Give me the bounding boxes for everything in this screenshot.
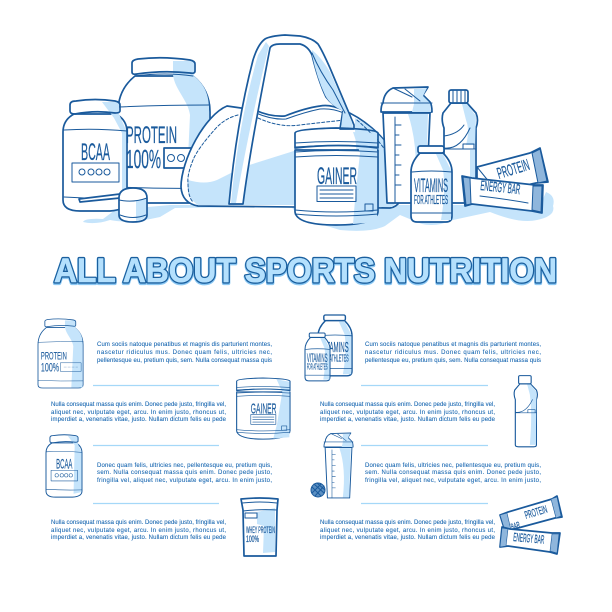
bcaa jar: BCAA (81, 139, 110, 166)
text block 3: fringilla vel, aliquet nec, vulputate eget, arcu. In enim justo, (97, 478, 272, 484)
text block 5: nascetur ridiculus mus. Donec quam felis, ultricies nec, (365, 350, 541, 356)
scoop (79, 188, 147, 222)
title: ALL ABOUT SPORTS NUTRITION (54, 253, 557, 291)
gainer jar (295, 128, 378, 225)
text block 1: pellentesque eu, pretium quis, sem. Nulla consequat massa quis (97, 358, 272, 364)
text block 4: Nulla consequat massa quis enim. Donec pede justo, fringilla vel, (51, 520, 226, 526)
icon: gainer jar: GAINER (251, 400, 277, 417)
title: ALL ABOUT SPORTS NUTRITION (54, 252, 557, 290)
icon: whey protein pouch (241, 498, 278, 556)
illustration: sports nutrition products: VITAMINS (414, 176, 448, 197)
text block 2: imperdiet a, venenatis vitae, justo. Nullam dictum felis eu pede (51, 417, 227, 423)
panel: left column: WHEY PROTEIN (246, 525, 275, 535)
icon: bcaa jar: BCAA (56, 457, 72, 472)
protein jar: PROTEIN (126, 122, 177, 149)
text block 5: pellentesque eu, pretium quis, sem. Nulla consequat massa quis (365, 358, 541, 364)
panel: right column: VITAMINS (320, 339, 349, 356)
text block 6: imperdiet a, venenatis vitae, justo. Nullam dictum felis eu pede (320, 417, 496, 423)
icon: protein jar: 100% (41, 361, 59, 374)
text block 6: Nulla consequat massa quis enim. Donec pede justo, fringilla vel, (320, 402, 495, 408)
gym bag (181, 35, 403, 208)
panel: right column: VITAMINS (307, 352, 328, 365)
text block 1: nascetur ridiculus mus. Donec quam felis, ultricies nec, (97, 350, 272, 356)
energy bar: ENERGY BAR (480, 177, 521, 197)
text block 2: Nulla consequat massa quis enim. Donec pede justo, fringilla vel, (51, 402, 226, 408)
text block 1 (97, 342, 272, 364)
text block 4: aliquet nec, vulputate eget, arcu. In enim justo, rhoncus ut, (51, 528, 226, 534)
icon: large vitamins bottle (318, 315, 352, 376)
icon: small vitamins bottle (305, 333, 330, 381)
protein bar: PROTEIN (495, 157, 532, 183)
icon: bcaa jar (46, 435, 82, 497)
text block 2 (51, 402, 227, 423)
text block 3: sem. Nulla consequat massa quis enim. Donec pede justo, (97, 470, 272, 476)
icon: gainer jar (237, 378, 290, 439)
text block 2: aliquet nec, vulputate eget, arcu. In enim justo, rhoncus ut, (51, 410, 226, 416)
title: ALL ABOUT SPORTS NUTRITION (54, 252, 557, 290)
text block 5: Cum sociis natoque penatibus et magnis dis parturient montes, (365, 342, 541, 348)
text block 3 (97, 463, 272, 484)
icon: protein bar: BAR (510, 520, 521, 532)
text block 7 (365, 463, 541, 484)
icon: protein jar (38, 319, 83, 388)
panel: right column: FOR ATHLETES (320, 354, 349, 364)
ground shadow (83, 192, 554, 231)
illustration: sports nutrition products (63, 35, 554, 231)
text block 5 (365, 342, 541, 364)
text block 4 (51, 520, 227, 541)
bag handle (229, 35, 354, 204)
gainer jar: GAINER (317, 163, 357, 190)
panel: left column (38, 319, 290, 556)
protein jar: 100% (126, 144, 161, 174)
text block 7: Donec quam felis, ultricies nec, pellentesque eu, pretium quis, (365, 463, 541, 469)
icon: energy bar (500, 527, 560, 554)
text block 3: Donec quam felis, ultricies nec, pellentesque eu, pretium quis, (97, 463, 272, 469)
panel: right column (305, 315, 562, 554)
text block 8: aliquet nec, vulputate eget, arcu. In enim justo, rhoncus ut, (320, 528, 495, 534)
panel: right column: FOR ATHLETES (307, 362, 328, 372)
text block 4: imperdiet a, venenatis vitae, justo. Nullam dictum felis eu pede (51, 535, 227, 541)
icon: energy bar: ENERGY BAR (513, 530, 545, 547)
icon: shaker bottle (324, 433, 353, 498)
illustration: sports nutrition products: FOR ATHLETES (414, 193, 448, 207)
water bottle (442, 90, 478, 203)
protein jar (118, 58, 210, 203)
icon: protein bar (500, 496, 562, 532)
text block 7: sem. Nulla consequat massa quis enim. Donec pede justo, (365, 470, 541, 476)
text block 6 (320, 402, 496, 423)
icon: water bottle (514, 376, 537, 447)
icon: whey protein pouch: 100% (246, 534, 259, 544)
energy bar (462, 176, 543, 213)
text block 1: Cum sociis natoque penatibus et magnis dis parturient montes, (97, 342, 272, 348)
protein bar (477, 148, 548, 196)
text block 6: aliquet nec, vulputate eget, arcu. In enim justo, rhoncus ut, (320, 410, 495, 416)
vitamins bottle (411, 146, 452, 222)
icon: protein bar: PROTEIN (523, 504, 549, 522)
shaker bottle (381, 87, 432, 203)
bcaa jar (63, 100, 127, 211)
icon: protein jar: PROTEIN (41, 351, 67, 362)
text block 8: Nulla consequat massa quis enim. Donec pede justo, fringilla vel, (320, 520, 495, 526)
text block 8 (320, 520, 496, 541)
text block 8: imperdiet a, venenatis vitae, justo. Nullam dictum felis eu pede (320, 535, 496, 541)
text block 7: fringilla vel, aliquet nec, vulputate eget, arcu. In enim justo, (365, 478, 541, 484)
icon: shaker ball (311, 483, 325, 497)
